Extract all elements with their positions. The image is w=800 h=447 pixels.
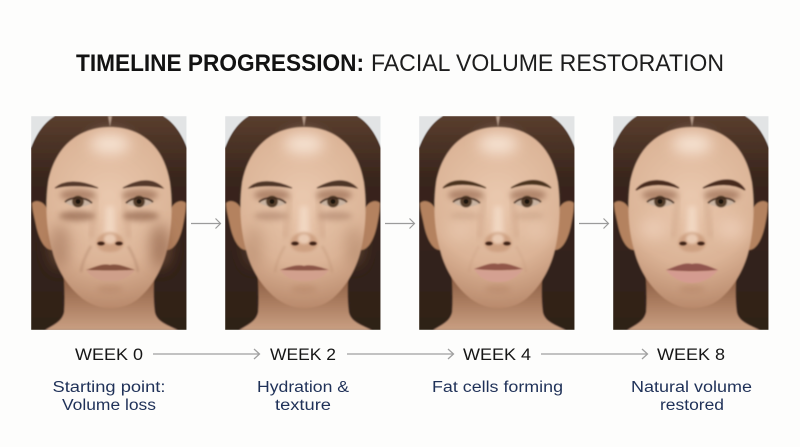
description: week 2: Hydration & — [257, 379, 350, 396]
label: week 4: WEEK 4 — [463, 345, 531, 364]
title — [76, 50, 724, 77]
arrow: week 0 to week 2 photo — [191, 218, 220, 228]
description: week 8: restored — [660, 397, 724, 414]
timeline arrow: week 0 to week 2 — [153, 349, 260, 359]
photo: week 4 face — [419, 116, 575, 330]
photo: week 2 face — [225, 116, 381, 330]
arrow: week 2 to week 4 photo — [385, 218, 414, 228]
arrow: week 4 to week 8 photo — [579, 218, 608, 228]
description: week 0: Starting point: — [52, 379, 166, 396]
label: week 0: WEEK 0 — [75, 345, 143, 364]
title: TIMELINE PROGRESSION: — [76, 50, 364, 77]
description: week 2 — [257, 379, 350, 414]
description: week 8: Natural volume — [631, 379, 752, 396]
label: week 8: WEEK 8 — [657, 345, 725, 364]
title: FACIAL VOLUME RESTORATION — [371, 50, 724, 77]
photo: week 0 face — [31, 116, 187, 330]
photo: week 8 face — [613, 116, 769, 330]
description: week 0 — [52, 379, 166, 414]
description: week 2: texture — [275, 397, 331, 414]
timeline arrow: week 2 to week 4 — [347, 349, 454, 359]
infographic: timeline progression — [31, 54, 768, 410]
label: week 2: WEEK 2 — [270, 345, 336, 364]
description: week 4: Fat cells forming — [432, 379, 563, 396]
timeline arrow: week 4 to week 8 — [541, 349, 648, 359]
description: week 8 — [631, 379, 752, 414]
description: week 0: Volume loss — [62, 397, 156, 414]
